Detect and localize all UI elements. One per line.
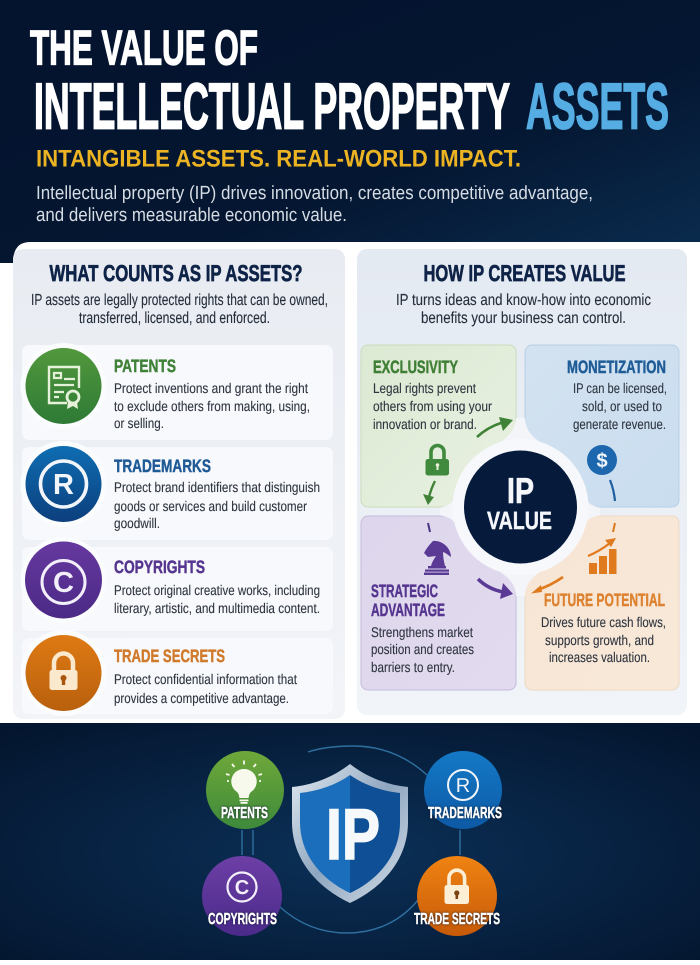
icon: patent document xyxy=(26,348,102,424)
value panel intro xyxy=(396,292,651,327)
card: trademarks xyxy=(20,441,333,540)
arrow: strategic tick xyxy=(428,523,430,532)
panel: how IP creates value xyxy=(357,249,687,715)
trademarks text: TRADEMARKS xyxy=(114,456,211,476)
footer band xyxy=(0,723,700,960)
box: exclusivity: EXCLUSIVITY xyxy=(373,357,458,377)
badge: copyrights: COPYRIGHTS xyxy=(208,911,277,928)
box: strategic advantage: barriers to entry. xyxy=(371,659,455,675)
patents text: PATENTS xyxy=(114,356,176,376)
trademarks text: goodwill. xyxy=(114,515,160,531)
patents text: or selling. xyxy=(114,415,164,431)
icon: green padlock xyxy=(426,446,449,476)
box: future potential: Drives future cash flows, xyxy=(541,614,666,630)
badge: trade secrets: TRADE SECRETS xyxy=(414,911,500,928)
badge: trademarks: TRADEMARKS xyxy=(428,805,502,822)
box: strategic advantage: ADVANTAGE xyxy=(371,600,445,620)
copyrights text: literary, artistic, and multimedia content. xyxy=(114,600,320,616)
card: copyrights xyxy=(20,537,333,631)
icon: IP shield xyxy=(292,764,408,903)
value panel intro: IP turns ideas and know-how into economic xyxy=(396,292,651,309)
trademarks text: goods or services and build customer xyxy=(114,498,307,514)
heading: what counts: WHAT COUNTS AS IP ASSETS? xyxy=(50,260,302,286)
box: future potential xyxy=(525,516,679,690)
arrow: future tick xyxy=(613,523,615,532)
intro text: Intellectual property (IP) drives innovation, creates competitive advantage, xyxy=(36,183,593,204)
intro text xyxy=(36,183,593,226)
box: future potential: increases valuation. xyxy=(549,649,650,665)
card: patents xyxy=(20,343,333,440)
box: monetization: generate revenue. xyxy=(573,416,666,432)
badge: trademarks: R xyxy=(456,775,470,797)
tagline: INTANGIBLE ASSETS. REAL-WORLD IMPACT. xyxy=(36,146,521,172)
title xyxy=(30,22,669,142)
arrow: future to strategic xyxy=(531,577,563,594)
patents text: Protect inventions and grant the right xyxy=(114,380,308,396)
box: exclusivity: Legal rights prevent xyxy=(373,380,476,396)
white content sheet xyxy=(0,242,700,723)
arrow: exclusivity to monetization xyxy=(477,417,513,437)
intro text: and delivers measurable economic value. xyxy=(36,205,347,226)
panel intro: IP assets are legally protected rights that can be owned, xyxy=(31,292,328,309)
arrow: exclusivity down xyxy=(423,481,435,505)
trademarks text: Protect brand identifiers that distinguish xyxy=(114,479,320,495)
trade secrets text: provides a competitive advantage. xyxy=(114,690,289,706)
badge: trade secrets xyxy=(414,856,500,936)
header band xyxy=(0,0,700,263)
value panel intro: benefits your business can control. xyxy=(421,310,626,327)
box: exclusivity xyxy=(361,345,516,507)
box: exclusivity: others from using your xyxy=(373,398,492,414)
panel intro xyxy=(31,292,328,327)
box: strategic advantage: Strengthens market xyxy=(371,624,473,640)
box: strategic advantage: position and creates xyxy=(371,641,474,657)
panel intro: transferred, licensed, and enforced. xyxy=(79,310,270,327)
icon: copyright mark xyxy=(25,542,102,618)
badge: patents xyxy=(206,751,284,829)
box: strategic advantage xyxy=(361,516,516,690)
box: strategic advantage: STRATEGIC xyxy=(371,581,438,601)
copyrights text: COPYRIGHTS xyxy=(114,557,205,577)
icon: light bulb xyxy=(226,760,262,804)
title: THE VALUE OF xyxy=(30,22,258,76)
copyrights text xyxy=(114,557,320,616)
icon: padlock xyxy=(26,635,102,711)
arrow: monetization line xyxy=(610,480,615,501)
connector lines xyxy=(242,746,460,933)
box: monetization: IP can be licensed, xyxy=(573,380,667,396)
box: monetization: MONETIZATION xyxy=(567,357,666,377)
icon: dollar coin: $ xyxy=(596,450,608,472)
icon: copyright mark: C xyxy=(53,567,74,599)
box: exclusivity: innovation or brand. xyxy=(373,416,477,432)
box: future potential: supports growth, and xyxy=(545,632,654,648)
centre hub: IP value xyxy=(440,418,600,596)
trademarks text xyxy=(114,456,320,531)
centre hub: IP value: VALUE xyxy=(487,507,552,535)
icon: chess knight xyxy=(424,541,451,575)
badge: trademarks xyxy=(424,751,502,829)
copyrights text: Protect original creative works, including xyxy=(114,582,320,598)
badge: patents: PATENTS xyxy=(221,805,268,822)
box: monetization xyxy=(525,345,679,507)
badge: copyrights xyxy=(202,856,282,936)
icon: registered mark xyxy=(26,446,102,522)
icon: registered mark: R xyxy=(53,469,74,501)
patents text xyxy=(114,356,310,431)
patents text: to exclude others from making, using, xyxy=(114,398,310,414)
badge: copyrights: C xyxy=(235,877,249,899)
heading: how IP creates value: HOW IP CREATES VALUE xyxy=(424,260,626,286)
trade secrets text: Protect confidential information that xyxy=(114,671,297,687)
trade secrets text: TRADE SECRETS xyxy=(114,646,225,666)
icon: dollar coin xyxy=(587,445,617,475)
icon: IP shield: IP xyxy=(326,795,380,875)
trade secrets text xyxy=(114,646,297,706)
centre hub: IP value: IP xyxy=(507,470,534,511)
card: trade secrets xyxy=(20,630,333,716)
box: monetization: sold, or used to xyxy=(582,398,662,414)
arrow: strategic to future xyxy=(478,579,513,599)
icon: growth bars xyxy=(588,538,616,574)
panel: what counts as IP assets xyxy=(13,249,345,719)
